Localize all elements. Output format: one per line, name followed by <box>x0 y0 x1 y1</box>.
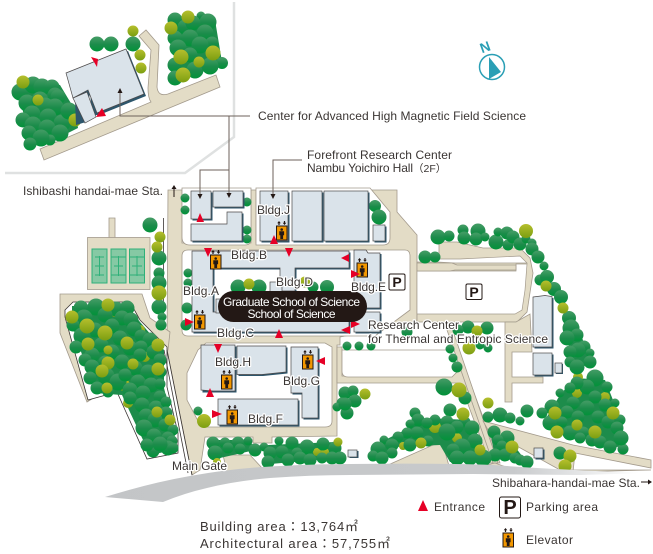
road: thin diagonal <box>447 328 498 463</box>
legend: entrance: Entrance <box>434 500 485 514</box>
olive trees <box>66 224 619 472</box>
building: north right <box>324 191 370 242</box>
inset: tree underlay <box>18 20 222 145</box>
compass <box>478 38 504 80</box>
building labels: Bldg.H <box>215 355 251 369</box>
area statistics: Architectural area：57,755㎡ <box>200 536 390 551</box>
building: Bldg.H <box>201 345 288 392</box>
building labels: Bldg.A <box>183 284 219 298</box>
block: north white lots <box>182 188 251 245</box>
inset: trees <box>13 13 226 149</box>
building: A B C D complex <box>192 251 350 334</box>
inset: building <box>66 49 146 125</box>
building: north small <box>373 225 386 242</box>
forest outline <box>65 302 178 459</box>
small buildings south <box>348 448 544 460</box>
label: Research Center: for Thermal and Entropic Science <box>368 332 548 346</box>
area statistics: Building area：13,764㎡ <box>200 519 358 534</box>
building labels: Bldg.B <box>231 248 267 262</box>
graduate school label: Graduate School of Science <box>223 295 360 309</box>
graduate school label <box>218 291 367 322</box>
road: parking ring <box>417 242 533 322</box>
map trees <box>68 195 627 467</box>
graduate school label: School of Science <box>248 307 336 321</box>
inset entrance markers <box>91 57 106 117</box>
building labels <box>183 203 386 426</box>
label: Research Center <box>368 318 548 346</box>
label: Forefront Research Center <box>307 148 452 175</box>
label: Research Center: Research Center <box>368 318 459 332</box>
building: Bldg.G <box>291 347 320 420</box>
inset frame <box>5 2 234 173</box>
label: Shibahara station: Shibahara-handai-mae Sta. <box>492 476 640 490</box>
building labels: Bldg.G <box>283 374 320 388</box>
parking icons <box>389 274 482 300</box>
forest olive understory <box>110 307 610 456</box>
building labels: Bldg.C <box>217 326 254 340</box>
building labels: Bldg.J <box>257 203 290 217</box>
legend: elevator <box>503 528 573 547</box>
label: Center for Advanced High Magnetic Field Science: Center for Advanced High Magnetic Field Science <box>258 109 526 123</box>
block: east small lot <box>337 347 500 463</box>
legend: parking area: P <box>503 497 517 519</box>
building: Bldg.F <box>218 399 300 426</box>
label: Ishibashi station: Ishibashi handai-mae Sta. <box>23 184 163 198</box>
leader lines <box>118 88 302 199</box>
building: Bldg.J <box>260 191 290 242</box>
road: parking strip <box>417 263 516 271</box>
block: south lot <box>187 343 332 427</box>
tennis court <box>88 238 150 290</box>
label: Forefront Research Center: Forefront Research Center <box>307 148 452 162</box>
building labels: Bldg.F <box>248 412 283 426</box>
label: Forefront Research Center: Nambu Yoichiro Hall <box>307 161 413 175</box>
compass: N <box>478 38 492 56</box>
parking lot interior <box>417 256 527 314</box>
building labels: Bldg.D <box>276 275 313 289</box>
block: main building lot <box>182 250 410 336</box>
tree underlay <box>72 306 622 464</box>
inset: road <box>40 30 220 160</box>
label: Main Gate: Main Gate <box>172 459 227 473</box>
legend: elevator: Elevator <box>526 533 573 547</box>
label: Forefront Research Center: （2F） <box>413 163 446 175</box>
building labels: Bldg.E <box>351 280 386 294</box>
road: tennis court connector <box>109 218 115 238</box>
building: Bldg.E <box>354 250 382 334</box>
elevator icons <box>194 221 368 424</box>
area statistics <box>200 519 390 551</box>
entrance markers <box>185 213 360 418</box>
road: east connector <box>505 314 543 402</box>
fence lines <box>164 218 192 475</box>
legend: parking area <box>500 497 598 519</box>
road: south east diagonal <box>483 421 651 472</box>
parking icons: P <box>392 274 402 290</box>
building: north pair <box>191 191 244 242</box>
gray main road <box>105 464 650 502</box>
road: main roads <box>167 190 417 475</box>
road: forest road <box>60 294 170 402</box>
legend: parking area: Parking area <box>526 500 598 514</box>
inset: olive trees <box>17 11 220 126</box>
building: north center <box>292 191 324 242</box>
road: south triangles <box>388 441 449 466</box>
building: east <box>533 296 563 376</box>
parking icons: P <box>469 284 479 300</box>
